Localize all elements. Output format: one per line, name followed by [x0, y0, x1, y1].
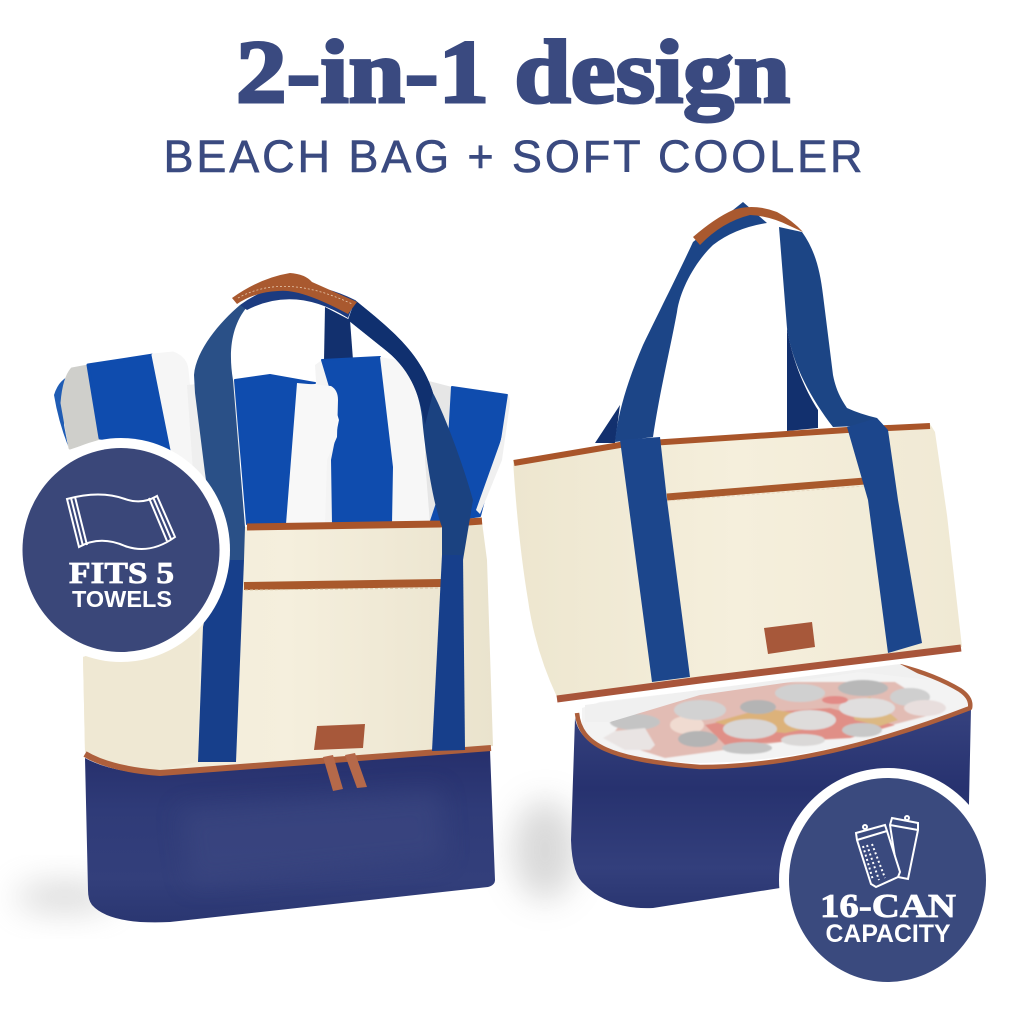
badge: 16-can capacity	[779, 768, 997, 992]
trim: pocket	[244, 583, 442, 586]
towel: far right	[425, 380, 510, 524]
strap: front right lower	[432, 555, 465, 751]
cooler compartment	[85, 750, 495, 922]
cans on ice	[603, 680, 946, 758]
leather patch	[764, 622, 815, 654]
trim: pocket	[667, 481, 865, 497]
strap: front right	[847, 418, 922, 653]
trim: bottom edge	[557, 648, 961, 699]
upper canvas bag	[513, 424, 962, 697]
canvas upper body	[83, 522, 493, 773]
handle strap	[240, 285, 355, 318]
zipper pulls	[323, 753, 367, 791]
back strap	[787, 328, 818, 431]
strap: right upper shade	[348, 300, 433, 425]
cooler interior lining	[582, 666, 968, 763]
towel: inner gap	[187, 380, 240, 530]
leather handle	[232, 273, 357, 314]
left bag: beach bag with towels	[54, 273, 510, 922]
badge text: FITS 5	[69, 555, 174, 590]
badge text: 16-CAN	[820, 888, 957, 925]
strap: dark back left	[595, 405, 620, 443]
leather handle	[693, 207, 803, 245]
ground shadows	[15, 800, 577, 911]
strap: front left	[620, 437, 690, 682]
cooler orange rim	[577, 666, 970, 767]
back handle strap	[324, 307, 353, 360]
canvas side shading	[83, 620, 200, 770]
icon: cans	[856, 816, 918, 887]
leather patch	[314, 724, 365, 750]
towel: centre right	[315, 357, 430, 524]
strap: arch right	[779, 227, 880, 427]
towel: centre left	[235, 375, 338, 524]
title: 2-in-1 design	[236, 23, 790, 122]
cooler highlight	[180, 790, 445, 885]
lining under bag	[585, 664, 930, 722]
strap: front right	[348, 300, 473, 560]
strap: front left lower	[198, 560, 244, 762]
trim: top edge	[247, 521, 482, 527]
badge: fits 5 towels	[12, 438, 230, 662]
strap: arch left	[615, 202, 767, 442]
strap: front left	[194, 305, 247, 560]
badge subtext: CAPACITY	[826, 920, 951, 948]
towel: far left rolled	[54, 353, 197, 467]
badge subtext: TOWELS	[72, 586, 172, 612]
icon: towel	[67, 494, 175, 549]
trim: top edge	[514, 426, 930, 463]
trim: cooler seam	[85, 748, 491, 773]
right bag: opened soft cooler	[513, 202, 971, 908]
subtitle: BEACH BAG + SOFT COOLER	[164, 131, 862, 182]
lower cooler body	[571, 708, 971, 908]
